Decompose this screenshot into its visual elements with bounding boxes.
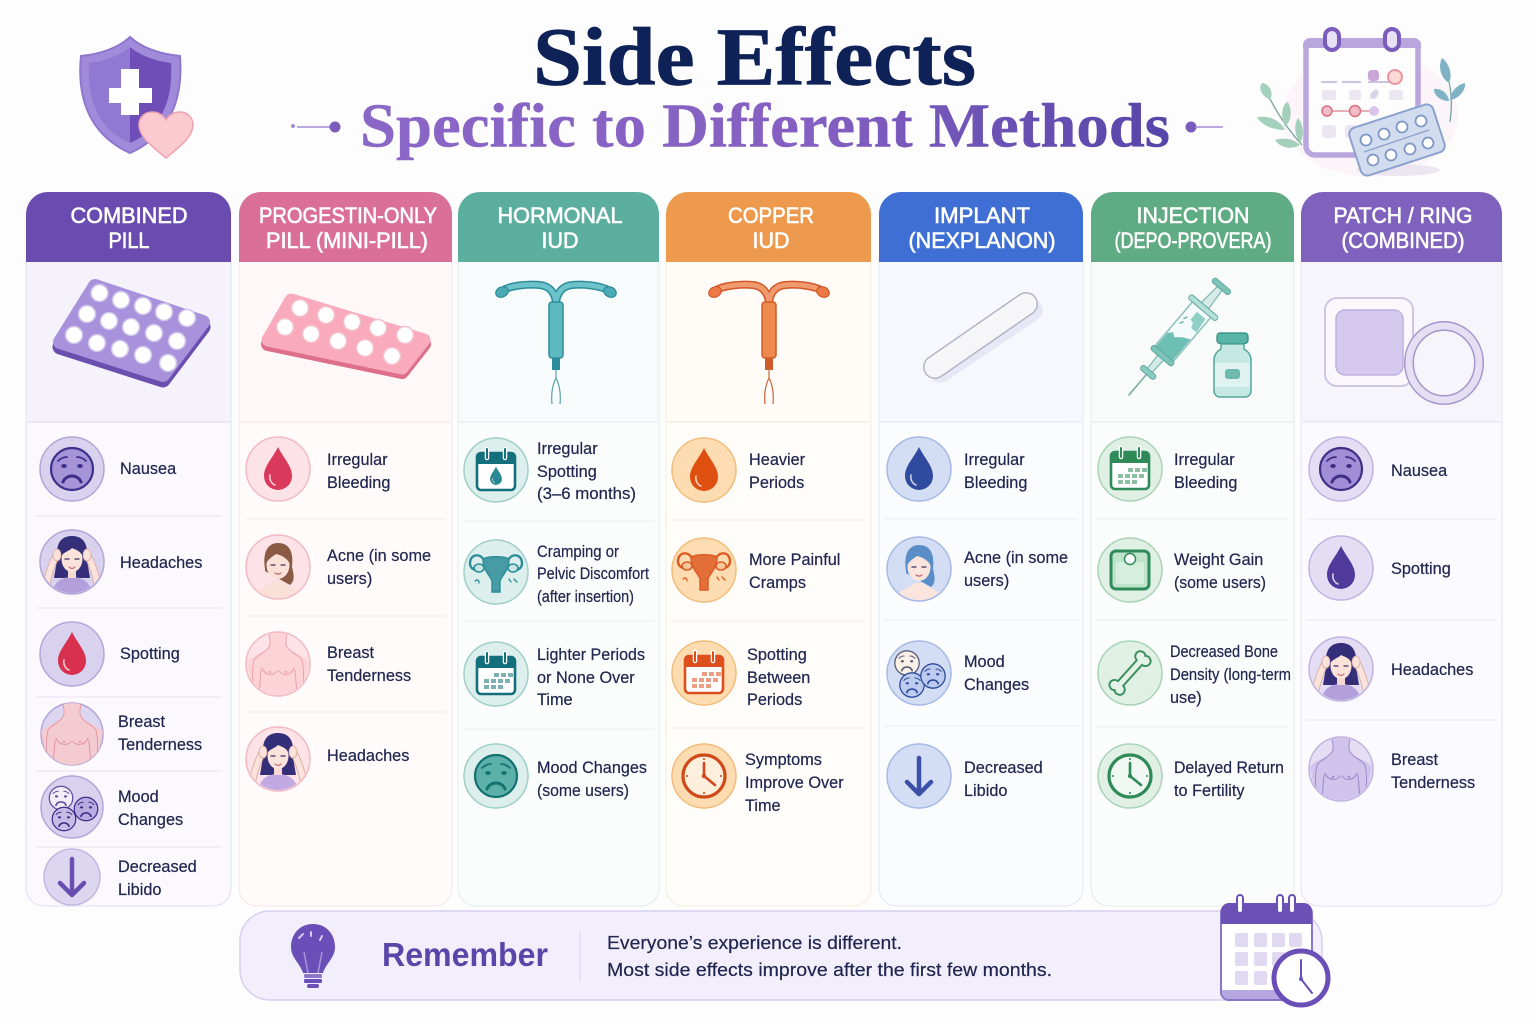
header: copper iud [666,192,871,262]
row: painful cramps [672,538,840,602]
row: lighter periods: Lighter Periods [537,646,645,664]
icon: calendar with blister pack and leaves [1257,29,1465,177]
row: symptoms improve: Symptoms [745,751,822,769]
header: hormonal iud [458,192,659,262]
text: remember message [607,932,1052,980]
icon: light bulb [291,924,335,988]
row: heavier periods: Periods [749,474,804,492]
row: mood changes: Changes [964,676,1029,694]
panel: copper iud [666,192,871,906]
row: breast tenderness [41,703,202,766]
row: symptoms improve: Time [745,797,781,815]
row: irregular bleeding [887,437,1027,501]
row: irregular bleeding: Irregular [327,451,388,469]
row: breast tenderness: Breast [327,644,375,662]
illustration: copper iud device [707,285,831,404]
row: acne [887,537,1068,601]
row: nausea: Nausea [1391,462,1448,480]
row: mood changes: Mood Changes [537,759,647,777]
row: breast tenderness: Breast [118,713,166,731]
row: irregular bleeding: Irregular [1174,451,1235,469]
illustration: syringe and vial [1115,273,1251,407]
panel: implant [879,192,1083,906]
row: decreased libido: Decreased [964,759,1043,777]
row: lighter periods [464,642,645,709]
row: painful cramps: Cramps [749,574,806,592]
row: mood changes: Mood [964,653,1005,671]
icon: calendar with clock [1221,895,1328,1005]
text: remember message: Most side effects improve after the first few months. [607,959,1052,980]
row: cramping: (after insertion) [537,588,634,606]
row: headaches [1309,637,1473,701]
row: decreased libido [887,744,1043,808]
row: bone density: Decreased Bone [1170,643,1278,661]
row: irregular bleeding: Bleeding [327,474,390,492]
panel: hormonal iud [458,192,659,906]
row: decreased libido [44,849,197,905]
illustration: implant rod [935,304,1032,372]
row: spotting between periods: Spotting [747,646,807,664]
text: remember message: Everyone’s experience is different. [607,932,902,953]
row: headaches: Headaches [1391,661,1473,679]
row: heavier periods [672,438,806,502]
row: irregular bleeding [1098,437,1237,501]
row: breast tenderness: Tenderness [1391,774,1475,792]
row: breast tenderness: Breast [1391,751,1439,769]
icon: shield with heart [80,37,193,158]
row: cramping: Cramping or [537,543,620,561]
row: spotting [40,622,180,686]
row: heavier periods: Heavier [749,451,806,469]
header: progestin-only pill: PILL (MINI-PILL) [266,228,428,253]
row: irregular bleeding: Bleeding [964,474,1027,492]
row: bone density: use) [1170,689,1202,707]
header: injection [1091,192,1294,262]
row: spotting [1309,536,1451,600]
row: spotting: Spotting [120,645,180,663]
row: decreased libido: Decreased [118,858,197,876]
illustration: hormonal iud device [494,285,618,404]
row: nausea [40,437,177,501]
header: progestin-only pill [239,192,452,262]
row: delayed return: Delayed Return [1174,759,1284,777]
header: hormonal iud: HORMONAL [498,203,622,228]
row: irregular bleeding: Irregular [964,451,1025,469]
subtitle ornament left [291,122,340,132]
row: breast tenderness: Tenderness [118,736,202,754]
panel: injection [1091,192,1294,906]
row: mood changes: Changes [118,811,183,829]
row: bone density [1098,641,1291,707]
row: cramping [464,540,649,606]
row: mood changes [887,641,1029,705]
row: irregular spotting: (3–6 months) [537,485,636,503]
title: Side Effects [533,10,976,102]
row: delayed return: to Fertility [1174,782,1245,800]
row: decreased libido: Libido [964,782,1007,800]
row: acne: Acne (in some [327,547,431,565]
row: nausea: Nausea [120,460,177,478]
row: spotting between periods: Periods [747,691,802,709]
illustration: purple blister pack [60,284,203,380]
panel: combined pill [26,192,231,906]
panel: patch / ring [1301,192,1502,906]
subtitle ornament right [1186,122,1223,132]
illustration: pink blister pack [268,300,424,372]
header: combined pill: COMBINED [70,203,188,228]
header: combined pill: PILL [108,228,150,253]
row: irregular spotting: Irregular [537,440,598,458]
row: acne: users) [327,570,372,588]
row: symptoms improve: Improve Over [745,774,844,792]
row: spotting: Spotting [1391,560,1451,578]
header: patch / ring: (COMBINED) [1342,228,1464,253]
row: breast tenderness [246,632,411,696]
row: headaches [40,530,202,594]
row: painful cramps: More Painful [749,551,840,569]
heading: remember: Remember [382,936,548,973]
row: irregular spotting: Spotting [537,463,597,481]
row: weight gain [1098,538,1266,602]
header: implant [879,192,1083,262]
illustration: patch and ring [1325,298,1479,400]
header: patch / ring: PATCH / RING [1334,203,1472,228]
callout: remember banner [240,895,1328,1005]
header: implant: IMPLANT [934,203,1030,228]
row: nausea [1309,437,1448,501]
header: copper iud: COPPER [728,203,814,228]
row: bone density: Density (long-term [1170,666,1291,684]
row: mood changes [464,744,647,808]
row: spotting between periods: Between [747,669,810,687]
row: breast tenderness: Tenderness [327,667,411,685]
header: hormonal iud: IUD [542,228,578,253]
row: acne: users) [964,572,1009,590]
row: irregular bleeding: Bleeding [1174,474,1237,492]
row: delayed return [1098,744,1284,808]
header: combined pill [26,192,231,262]
header: implant: (NEXPLANON) [908,228,1056,253]
row: spotting between periods [672,641,810,709]
row: headaches: Headaches [120,554,202,572]
row: weight gain: (some users) [1174,574,1266,592]
row: irregular bleeding [246,437,390,501]
row: symptoms improve [672,744,844,815]
row: mood changes [41,776,183,838]
row: acne: Acne (in some [964,549,1068,567]
row: headaches: Headaches [327,747,409,765]
row: lighter periods: Time [537,691,573,709]
header: progestin-only pill: PROGESTIN-ONLY [259,203,437,228]
row: breast tenderness [1309,737,1475,801]
header: injection: (DEPO-PROVERA) [1114,228,1272,253]
row: weight gain: Weight Gain [1174,551,1263,569]
row: mood changes: Mood [118,788,159,806]
row: lighter periods: or None Over [537,669,635,687]
panel: progestin-only pill [239,192,452,906]
row: irregular spotting [464,438,636,503]
row: decreased libido: Libido [118,881,161,899]
subtitle: Specific to Different Methods [360,92,1170,160]
header: patch / ring [1301,192,1502,262]
row: cramping: Pelvic Discomfort [537,565,649,583]
header: copper iud: IUD [752,228,790,253]
row: headaches [246,727,409,791]
row: acne [246,535,431,599]
row: mood changes: (some users) [537,782,629,800]
header: injection: INJECTION [1136,203,1250,228]
